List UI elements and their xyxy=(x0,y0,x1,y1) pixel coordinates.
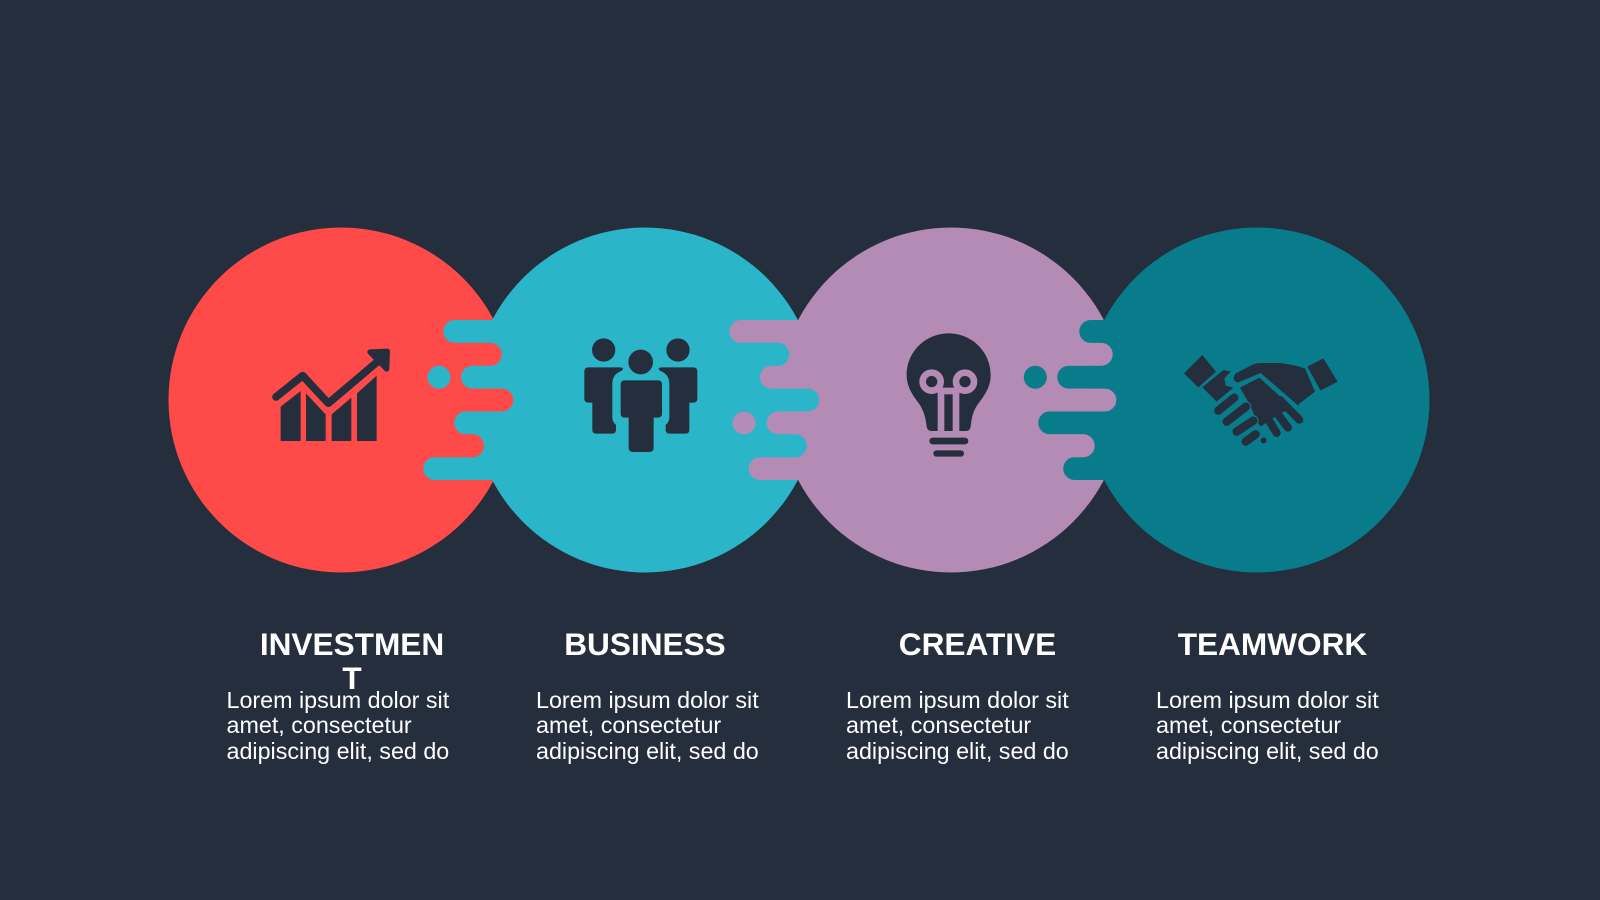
heading: investment: INVESTMENT xyxy=(260,626,444,696)
text: business description: Lorem ipsum dolor sit xyxy=(536,687,759,713)
icon: rising bar chart with arrow xyxy=(276,351,387,441)
text: teamwork description xyxy=(1156,687,1379,764)
text: investment description: Lorem ipsum dolor sit xyxy=(226,687,449,713)
circle: teamwork xyxy=(1084,228,1430,572)
text: creative description: adipiscing elit, sed do xyxy=(846,738,1069,764)
text: business description: amet, consectetur xyxy=(536,712,721,738)
connector: red to cyan xyxy=(400,320,564,480)
heading: teamwork: TEAMWORK xyxy=(1178,626,1367,662)
text: investment description: adipiscing elit, sed do xyxy=(226,738,449,764)
circle: investment xyxy=(168,228,514,572)
icon: three people xyxy=(584,338,697,452)
text: business description xyxy=(536,687,759,764)
text: investment description xyxy=(226,687,450,764)
icon: light bulb xyxy=(907,333,991,457)
heading: creative: CREATIVE xyxy=(899,626,1056,662)
heading: business: BUSINESS xyxy=(564,626,726,662)
text: business description: adipiscing elit, sed do xyxy=(536,738,759,764)
connector: cyan to purple xyxy=(700,320,877,480)
circle: business xyxy=(472,228,818,572)
text: creative description: Lorem ipsum dolor sit xyxy=(846,687,1069,713)
text: creative description xyxy=(846,687,1069,764)
text: teamwork description: adipiscing elit, sed do xyxy=(1156,738,1379,764)
text: teamwork description: amet, consectetur xyxy=(1156,712,1341,738)
text: investment description: amet, consectetur xyxy=(226,712,412,738)
text: creative description: amet, consectetur xyxy=(846,712,1031,738)
text: teamwork description: Lorem ipsum dolor sit xyxy=(1156,687,1379,713)
circle: creative xyxy=(778,228,1124,572)
connector: purple to teal xyxy=(1010,320,1183,480)
icon: handshake xyxy=(1184,355,1338,443)
